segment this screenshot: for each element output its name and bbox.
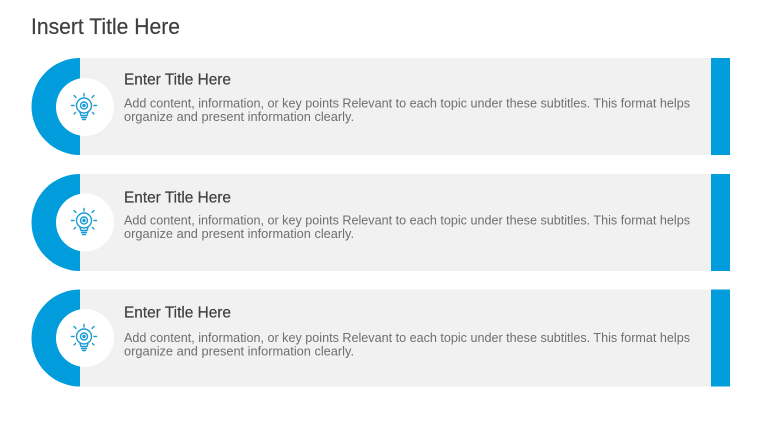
body text: organize and present information clearly. — [124, 344, 354, 358]
body text: Add content, information, or key points Relevant to each topic under these subtitles. This format helps — [124, 212, 690, 228]
body text: organize and present information clearly. — [124, 109, 354, 124]
heading: Enter Title Here — [124, 304, 231, 322]
blue half circle — [31, 174, 80, 271]
panel background — [80, 174, 711, 271]
body text: Add content, information, or key points Relevant to each topic under these subtitles. This format helps — [124, 330, 690, 345]
right accent bar — [711, 290, 730, 386]
white circle — [56, 194, 114, 252]
icon: light bulb — [72, 94, 96, 120]
white circle — [56, 309, 114, 367]
right accent bar — [711, 174, 730, 271]
blue half circle — [32, 58, 80, 155]
panel background — [80, 58, 711, 155]
right accent bar — [711, 58, 730, 155]
body text: Add content, information, or key points Relevant to each topic under these subtitles. This format helps — [124, 96, 690, 110]
panel background — [80, 290, 711, 386]
heading: Enter Title Here — [124, 72, 231, 88]
body text — [124, 330, 690, 358]
icon: light bulb — [72, 208, 96, 234]
panel: row 1 — [32, 58, 730, 155]
heading: Enter Title Here — [124, 190, 231, 206]
title: Insert Title Here — [31, 14, 180, 39]
body text — [124, 212, 690, 241]
panel: row 3 — [31, 290, 730, 386]
body text: organize and present information clearly. — [124, 226, 354, 241]
panel: row 2 — [31, 174, 730, 271]
icon: light bulb — [72, 324, 96, 350]
white circle — [56, 78, 114, 136]
blue half circle — [31, 290, 80, 386]
body text — [124, 96, 690, 124]
